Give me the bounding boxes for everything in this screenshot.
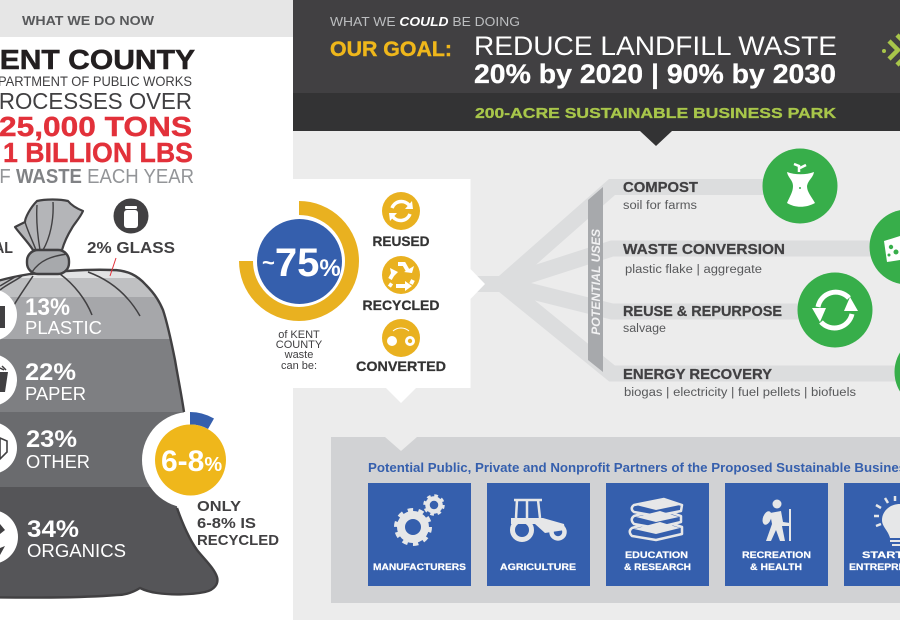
chart: 75% ring: ~ xyxy=(262,250,275,275)
panel: right background xyxy=(293,131,900,620)
panel: goal header xyxy=(293,0,900,146)
heading: partners: Potential Public, Private and Nonprofit Partners of the Proposed Sustainable Business Park xyxy=(368,461,900,475)
label: potential uses bar: POTENTIAL USES xyxy=(591,229,603,335)
panel: 75% callout xyxy=(293,179,485,403)
chart: 75% ring: 75 xyxy=(275,241,319,285)
text: our goal: OUR GOAL: xyxy=(330,38,452,61)
icon: recycled xyxy=(382,256,420,294)
label: potential uses bar xyxy=(588,187,603,372)
chart: 75% ring xyxy=(246,208,352,314)
use: waste conversion: WASTE CONVERSION xyxy=(623,241,785,258)
text: of Kent County waste can be: can be: xyxy=(281,360,317,372)
icon: reuse arrows xyxy=(798,272,872,348)
text: only 6-8% is recycled: ONLY xyxy=(197,498,241,515)
text: only 6-8% is recycled: 6-8% IS xyxy=(197,515,256,532)
band: organics: ORGANICS xyxy=(27,541,126,561)
band: paper xyxy=(0,354,86,406)
card: education and research xyxy=(606,483,709,586)
label: recycled: RECYCLED xyxy=(362,297,440,313)
use: energy recovery xyxy=(623,366,856,399)
icon: reused xyxy=(382,192,420,230)
band: organics xyxy=(0,510,126,564)
band: plastic xyxy=(0,289,102,341)
use: reuse and repurpose: REUSE & REPURPOSE xyxy=(623,303,782,320)
band: paper: PAPER xyxy=(25,384,86,404)
use: reuse and repurpose: salvage xyxy=(623,323,666,335)
icon: glass jar xyxy=(114,198,148,234)
use: compost: soil for farms xyxy=(623,200,697,212)
icon: converted xyxy=(382,319,420,357)
card: education and research: EDUCATION xyxy=(625,550,688,561)
band: other: OTHER xyxy=(26,452,90,472)
text: of Kent County waste can be: of KENT xyxy=(278,329,320,341)
text: of Kent County waste can be: COUNTY xyxy=(276,339,323,351)
label: reused: REUSED xyxy=(372,233,430,249)
card: education and research: & RESEARCH xyxy=(624,562,691,573)
diagram: potential uses branches xyxy=(470,187,900,374)
label: converted: CONVERTED xyxy=(356,358,446,374)
icon: apple core xyxy=(762,148,838,224)
text: of Kent County waste can be xyxy=(276,329,323,372)
icon: plastic flake xyxy=(870,210,900,284)
card: startups and entrepreneurs xyxy=(844,483,900,586)
chart: 6-8% recycled gauge xyxy=(142,412,238,508)
use: compost xyxy=(623,179,698,212)
heading: reduce landfill waste: REDUCE LANDFILL WASTE xyxy=(474,31,837,61)
text: only 6-8% is recycled: RECYCLED xyxy=(197,532,279,549)
card: agriculture: AGRICULTURE xyxy=(500,562,576,573)
band: plastic: PLASTIC xyxy=(25,318,102,338)
text: what we could be doing: WHAT WE COULD BE DOING xyxy=(330,14,520,29)
icon: bag neck and knot xyxy=(15,200,83,274)
heading: Kent County waste totals: 25,000 TONS xyxy=(0,111,192,142)
panel: what we do now header xyxy=(0,0,293,37)
band: other: 23% xyxy=(26,426,77,453)
band: plastic: 13% xyxy=(25,294,70,321)
chart: 75% ring: % xyxy=(319,255,341,282)
heading: Kent County waste totals: 1 BILLION LBS xyxy=(3,137,193,168)
text: of Kent County waste can be: waste xyxy=(284,349,313,361)
use: reuse and repurpose xyxy=(623,303,782,335)
heading: goal targets: 20% by 2020 | 90% by 2030 xyxy=(474,59,836,89)
card: recreation and health xyxy=(725,483,828,586)
band: paper: 22% xyxy=(25,359,76,386)
chart: 6-8% recycled gauge: 6-8% xyxy=(161,445,222,478)
use: compost: COMPOST xyxy=(623,179,698,196)
card: manufacturers: MANUFACTURERS xyxy=(373,562,466,573)
band: other xyxy=(0,422,90,474)
icon: logo chevrons xyxy=(882,35,900,65)
text: only 6-8% is recycled xyxy=(197,498,279,549)
panel: partners xyxy=(331,437,900,603)
use: energy recovery: biogas | electricity | fuel pellets | biofuels xyxy=(624,387,856,399)
card: recreation and health: & HEALTH xyxy=(750,562,802,573)
callout line to glass band xyxy=(110,258,116,276)
card: agriculture xyxy=(487,483,590,586)
panel: what we do now header: WHAT WE DO NOW xyxy=(22,13,155,28)
band: organics: 34% xyxy=(27,516,79,543)
use: energy recovery: ENERGY RECOVERY xyxy=(623,366,772,383)
heading: business park: 200-ACRE SUSTAINABLE BUSINESS PARK xyxy=(475,105,836,122)
use: waste conversion: plastic flake | aggregate xyxy=(625,264,762,276)
chart: waste bag with bands xyxy=(0,268,219,599)
heading: Kent County waste totals xyxy=(0,44,195,188)
card: manufacturers xyxy=(368,483,471,586)
label: 2% glass: 2% GLASS xyxy=(87,240,175,257)
icon: energy circle xyxy=(894,334,900,410)
use: waste conversion xyxy=(623,241,785,276)
card: recreation and health: RECREATION xyxy=(742,550,811,561)
